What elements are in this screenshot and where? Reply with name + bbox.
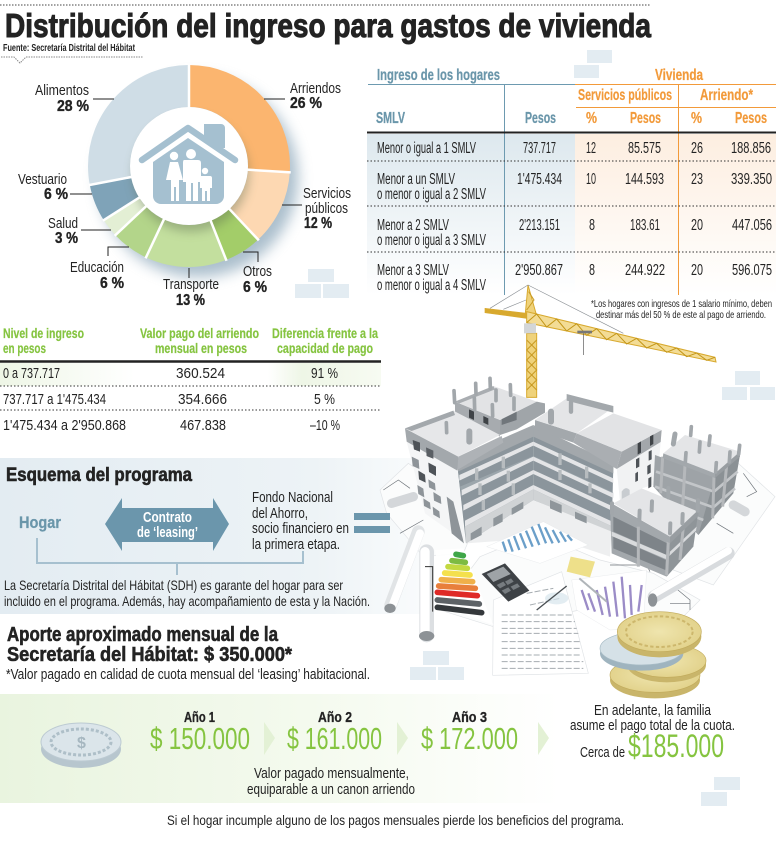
right tower — [653, 455, 715, 535]
table row 2: o menor o igual a 2 SMLV — [377, 186, 486, 203]
donut label: Educación: Educación — [70, 259, 124, 276]
segment: Vestuario 6% — [109, 86, 269, 246]
text: monthly payment note: Valor pagado mensualmente, — [254, 765, 409, 782]
table row 1 — [377, 140, 771, 157]
table: rent by income level: 5 % — [314, 391, 335, 408]
end wall — [617, 442, 661, 502]
panel: program scheme background — [0, 458, 420, 614]
donut label: Educación — [70, 247, 129, 292]
chevron — [264, 722, 275, 755]
text: family assumes the full payment — [570, 702, 735, 764]
closing note: Si el hogar incumple alguno de los pagos mensuales pierde los beneficios del programa. — [167, 812, 624, 828]
column header: income level: en pesos — [3, 340, 46, 356]
title: Distribución del ingreso para gastos de vivienda — [5, 7, 652, 44]
table row 3: 8 — [589, 217, 595, 234]
donut label: Servicios públicos: 12 % — [304, 215, 332, 232]
donut label: Transporte: 13 % — [176, 292, 205, 309]
table row 4: 8 — [589, 262, 595, 279]
donut label: Vestuario: Vestuario — [18, 171, 67, 188]
table: rent by income level: 0 a 737.717 — [3, 365, 60, 382]
segment: Salud 3% — [109, 86, 269, 246]
text: SDH guarantor: La Secretaría Distrital del Hábitat (SDH) es garante del hogar para ser — [4, 577, 343, 593]
value: year 2: Año 2 — [318, 709, 352, 726]
heading: monthly contribution: Secretaría del Hábitat: $ 350.000* — [7, 643, 292, 666]
footnote: minimum wage households — [591, 298, 772, 321]
arrow: leasing contract: Contrato — [143, 510, 192, 526]
table row 4: Menor a 3 SMLV — [377, 262, 449, 279]
text: Fondo Nacional del Ahorro: la primera etapa. — [252, 536, 340, 553]
table row 4: o menor o igual a 4 SMLV — [377, 277, 486, 294]
donut label: Servicios públicos: públicos — [305, 200, 348, 217]
gold and silver coins — [600, 612, 706, 698]
table: rent by income level: 91 % — [311, 365, 338, 382]
column header: rent payment — [140, 325, 259, 356]
icon: house with family — [142, 124, 235, 204]
building: left and upper part — [405, 378, 545, 543]
chevron — [397, 722, 408, 755]
table: household income and housing costs: Pesos — [525, 110, 556, 127]
upper block — [455, 402, 500, 437]
text: Fondo Nacional del Ahorro: del Ahorro, — [252, 505, 308, 522]
donut label: Alimentos — [35, 82, 114, 115]
donut label: Educación: 6 % — [100, 275, 124, 292]
column header: rent payment: Valor pago del arriendo — [140, 325, 259, 341]
table: household income and housing costs — [367, 67, 776, 295]
table: rent by income level: 737.717 a 1'475.434 — [3, 391, 106, 408]
donut label: Vestuario — [18, 171, 92, 203]
chevron — [538, 722, 549, 755]
table row 2: 144.593 — [625, 171, 664, 188]
scrolls — [391, 497, 745, 635]
icon: silver coin: $ — [77, 735, 86, 752]
table row 1: 737.717 — [523, 140, 556, 157]
text: family assumes the full payment: $185.000 — [628, 728, 724, 764]
table row 4: 20 — [691, 262, 703, 279]
table row 2: 10 — [586, 171, 596, 188]
value: year 1: Año 1 — [184, 709, 215, 726]
column header: difference: capacidad de pago — [277, 340, 373, 356]
donut label: Otros: 6 % — [243, 279, 267, 296]
segment: Arriendos 26% — [109, 86, 269, 246]
value: year 3: Año 3 — [452, 709, 487, 726]
donut label: Otros: Otros — [243, 263, 272, 280]
table: rent by income level — [0, 325, 381, 434]
value: year 2: $ 161.000 — [287, 721, 382, 756]
donut label: Arriendos: Arriendos — [290, 80, 341, 97]
text: Fondo Nacional del Ahorro — [252, 489, 349, 553]
table: rent by income level: 354.666 — [178, 391, 227, 408]
top dotted rule — [0, 4, 651, 6]
table row 1: 12 — [586, 140, 596, 157]
table: rent by income level: 360.524 — [176, 365, 225, 382]
column header: income level — [3, 325, 84, 356]
value: year 3: $ 172.000 — [421, 721, 518, 756]
text: family assumes the full payment: Cerca de — [580, 744, 625, 761]
brick decorations — [295, 50, 775, 806]
donut label: Vestuario: 6 % — [44, 186, 68, 203]
donut label: Alimentos: 28 % — [57, 98, 89, 115]
table row 3: 183.61 — [630, 217, 660, 234]
table row 2: Menor a un SMLV — [377, 171, 455, 188]
building: right part — [535, 394, 740, 577]
sticky note — [567, 557, 595, 577]
calculator — [482, 563, 529, 602]
source line — [1, 43, 143, 63]
table row 3: 20 — [691, 217, 703, 234]
text: family assumes the full payment: En adelante, la familia — [594, 702, 712, 719]
table heading: Vivienda: Vivienda — [655, 67, 703, 84]
heading: program scheme: Esquema del programa — [6, 464, 192, 486]
table: household income and housing costs: Servicios públicos — [578, 87, 672, 104]
table row 3 — [377, 217, 772, 249]
donut label: Salud — [48, 215, 111, 247]
segment: Alimentos 28% — [109, 86, 269, 246]
table: household income and housing costs: % — [586, 110, 597, 127]
donut label: Arriendos: 26 % — [290, 95, 322, 112]
icon: silver coin — [41, 723, 121, 768]
heading: monthly contribution — [7, 623, 292, 666]
arrow: leasing contract: de ‘leasing’ — [137, 525, 198, 541]
lower right block — [610, 505, 670, 577]
donut label: Alimentos: Alimentos — [35, 82, 89, 99]
energy rating chart — [435, 548, 493, 625]
table row 2 — [377, 171, 772, 203]
arrow: leasing contract — [105, 498, 229, 551]
blueprints — [380, 463, 775, 630]
segment: Educación 6% — [109, 86, 269, 246]
donut label: Servicios públicos: Servicios — [303, 185, 351, 202]
table row 3: o menor o igual a 3 SMLV — [377, 232, 486, 249]
text: Fondo Nacional del Ahorro: Fondo Nacional — [252, 489, 333, 506]
table row 1: Menor o igual a 1 SMLV — [377, 140, 476, 157]
note: leasing value: *Valor pagado en calidad de cuota mensual del ‘leasing’ habitacional. — [6, 667, 370, 683]
value: year 3 — [421, 709, 518, 756]
table row 1: 26 — [691, 140, 703, 157]
table row 2: 1'475.434 — [517, 171, 562, 188]
crane — [485, 285, 716, 397]
donut label: Servicios públicos — [282, 185, 351, 232]
table: household income and housing costs: SMLV — [376, 110, 405, 127]
illustration: building under construction — [380, 285, 775, 698]
donut label: Arriendos — [264, 80, 341, 112]
table row 4: 2'950.867 — [515, 262, 563, 279]
icon: equals sign — [354, 513, 390, 533]
value: year 1: $ 150.000 — [150, 721, 250, 756]
donut label: Transporte — [163, 268, 219, 309]
table row 4 — [377, 262, 772, 294]
column header: rent payment: mensual en pesos — [155, 340, 247, 356]
text: SDH guarantor — [4, 577, 370, 609]
label: Hogar: Hogar — [19, 514, 62, 532]
left roof — [405, 428, 458, 471]
text: SDH guarantor: incluido en el programa. Además, hay acompañamiento de esta y la Nación. — [4, 593, 370, 609]
donut label: Transporte: Transporte — [163, 276, 219, 293]
text: monthly payment note: equiparable a un canon arriendo — [247, 781, 415, 798]
table row 3: 2'213.151 — [519, 217, 560, 234]
table: rent by income level: 467.838 — [180, 417, 226, 434]
table: household income and housing costs: Pesos — [630, 110, 661, 127]
building: facades — [457, 425, 613, 557]
donut label: Salud: 3 % — [55, 230, 78, 247]
text: family assumes the full payment: asume el pago total de la cuota. — [570, 717, 735, 734]
table row 3: Menor a 2 SMLV — [377, 217, 449, 234]
text: Fondo Nacional del Ahorro: socio financiero en — [252, 520, 349, 537]
text: monthly payment note — [247, 765, 415, 798]
center and right roofs — [535, 420, 577, 443]
table: household income and housing costs: % — [691, 110, 702, 127]
table: household income and housing costs: Arriendo* — [700, 87, 754, 104]
table row 1: 85.575 — [628, 140, 661, 157]
table row 2: 23 — [691, 171, 703, 188]
segment: Otros 6% — [109, 86, 269, 246]
chart paper: purple bars — [572, 570, 647, 630]
table heading: Ingreso de los hogares: Ingreso de los hogares — [377, 67, 500, 84]
columns — [446, 378, 514, 442]
document sheet — [493, 572, 588, 675]
column header: difference — [272, 325, 378, 356]
bracket connector — [37, 538, 303, 575]
source line: Fuente: Secretaría Distrital del Hábitat — [3, 43, 135, 54]
donut chart — [89, 64, 298, 277]
table: rent by income level: 1'475.434 a 2'950.868 — [3, 417, 126, 434]
value: year 1 — [150, 709, 250, 756]
heading: monthly contribution: Aporte aproximado mensual de la — [7, 623, 278, 646]
donut label: Salud: Salud — [48, 215, 78, 232]
column header: difference: Diferencia frente a la — [272, 325, 378, 341]
table row 4: 244.922 — [625, 262, 665, 279]
segment: Transporte 13% — [109, 86, 269, 246]
table: rent by income level: –10 % — [310, 417, 340, 434]
value: year 2 — [287, 709, 382, 756]
pen and glasses — [579, 578, 607, 602]
donut label: Otros — [243, 252, 272, 296]
column header: income level: Nivel de ingreso — [3, 325, 84, 341]
segment: Servicios públicos 12% — [109, 86, 269, 246]
chart paper: blue bars — [487, 522, 588, 563]
panel: green payments background — [0, 694, 560, 803]
